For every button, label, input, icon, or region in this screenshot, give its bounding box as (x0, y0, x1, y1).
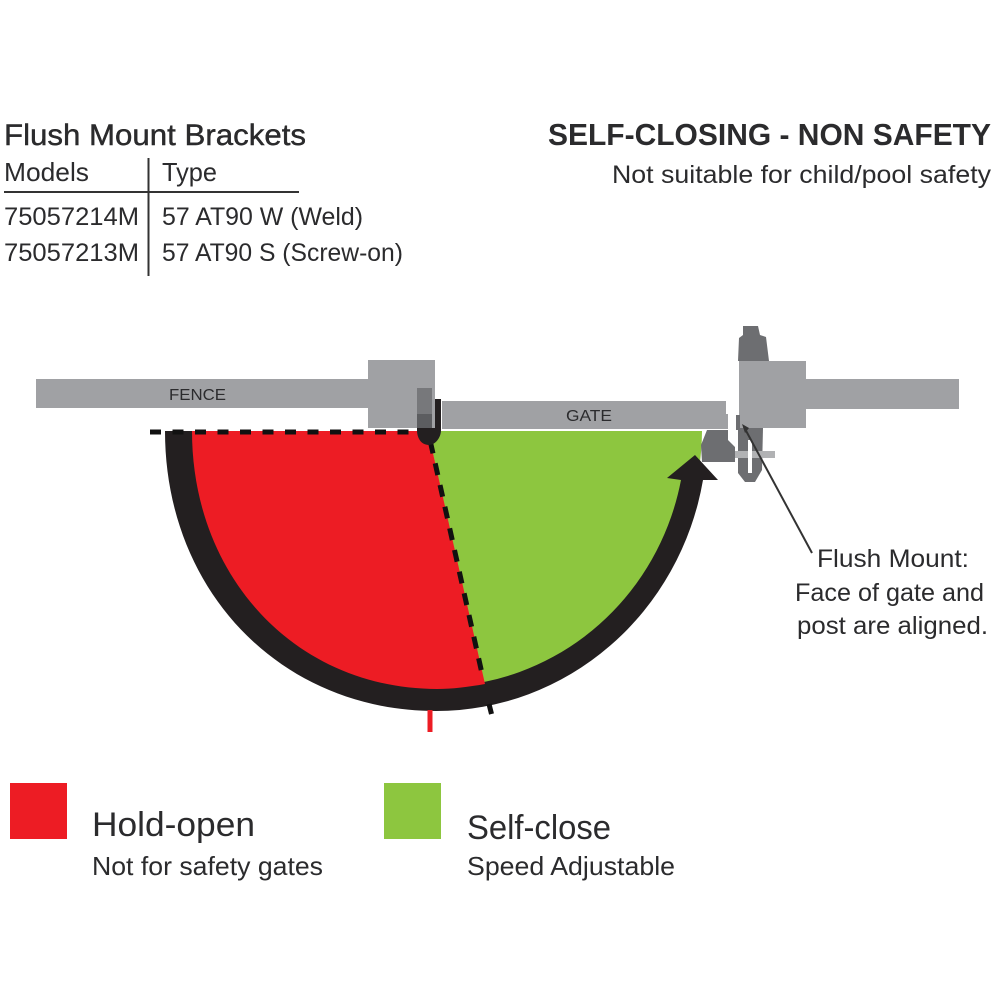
gate (442, 401, 728, 429)
hinge top cap (738, 326, 769, 361)
callout: flush mount (742, 424, 988, 640)
row: screw-on type: 57 AT90 S (Screw-on) (162, 239, 403, 267)
swing arc arrow (165, 431, 718, 711)
self-close note: Speed Adjustable (467, 851, 675, 881)
green self-close zone (428, 431, 702, 690)
post rail (800, 379, 959, 409)
leader line (744, 427, 812, 553)
diagram: gate swing (36, 326, 959, 732)
fence label: FENCE (169, 387, 226, 404)
gate bracket (701, 430, 735, 462)
callout line 2: Face of gate and (795, 579, 984, 607)
fence (36, 360, 435, 428)
gate label: GATE (566, 408, 612, 425)
table rules (4, 158, 299, 276)
dashed line: hold-open boundary (150, 430, 416, 434)
legend: self-close (384, 783, 675, 881)
fence post (368, 360, 435, 428)
row: weld model: 75057214M (4, 203, 139, 231)
dashed line: self-close boundary (430, 440, 483, 678)
hinge plate shadow (417, 414, 432, 428)
column header: type: Type (162, 157, 217, 187)
table: flush mount brackets (4, 119, 403, 276)
hinge: left (417, 388, 441, 445)
self-close label: Self-close (467, 809, 611, 847)
lower dash below arc (489, 704, 492, 714)
hinge tab (736, 415, 740, 430)
red hold-open zone (192, 431, 485, 689)
legend: hold-open (10, 783, 323, 881)
post block (739, 361, 806, 428)
hinge knuckle (417, 399, 441, 445)
hold-open note: Not for safety gates (92, 851, 323, 881)
row: screw-on model: 75057213M (4, 239, 139, 267)
hinge: right (701, 326, 959, 482)
hinge plate (417, 388, 432, 428)
hinge slot (748, 440, 752, 473)
leader arrow tip (742, 424, 749, 433)
hinge lower body (738, 428, 763, 482)
table heading: Flush Mount Brackets (4, 119, 306, 152)
gate bar (442, 401, 726, 429)
callout line 1: Flush Mount: (817, 545, 969, 573)
hinge pin (735, 451, 775, 458)
column header: models: Models (4, 157, 89, 187)
gate step (726, 414, 728, 429)
row: weld type: 57 AT90 W (Weld) (162, 203, 363, 231)
subheading: safety note: Not suitable for child/pool safety (612, 161, 992, 189)
red swatch (10, 783, 67, 839)
heading: self-closing non safety: SELF-CLOSING - NON SAFETY (548, 117, 991, 152)
callout line 3: post are aligned. (797, 612, 988, 640)
green swatch (384, 783, 441, 839)
fence rail (36, 379, 376, 408)
hold-open label: Hold-open (92, 806, 255, 844)
red tick (428, 710, 432, 732)
